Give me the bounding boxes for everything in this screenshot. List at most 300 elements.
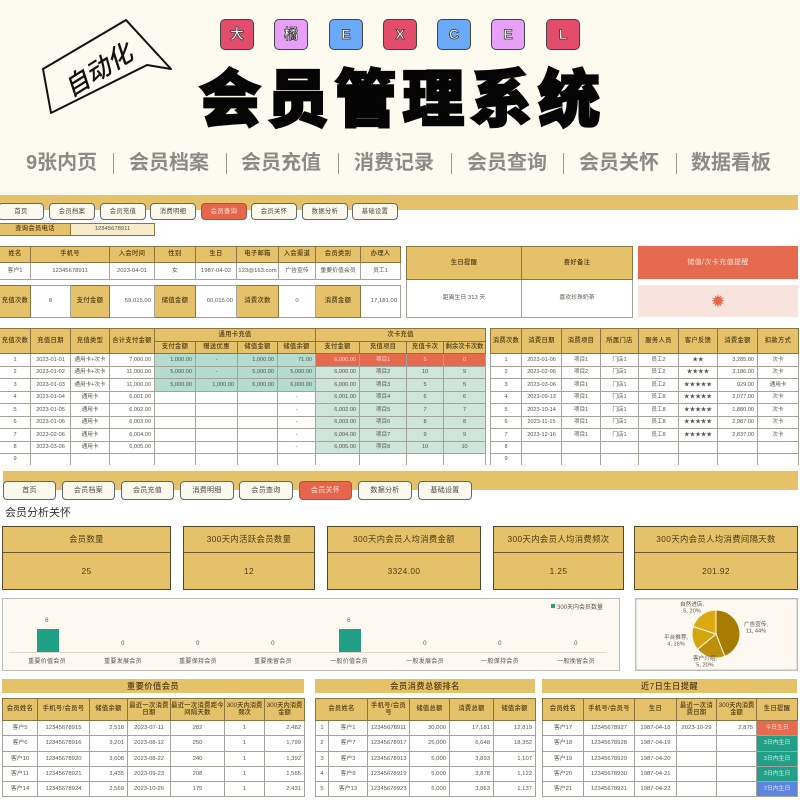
table: member profile: 生日 bbox=[209, 250, 223, 257]
table: recharge records: 5,000.00 bbox=[252, 369, 274, 375]
table: recharge records: 2023-02-06 bbox=[36, 432, 65, 438]
table: birthday reminder list: 12345678931 bbox=[591, 786, 627, 792]
table: birthday reminder list: 3日内生日 bbox=[764, 756, 790, 762]
table: spending ranking: 储值总额 bbox=[416, 705, 443, 712]
table: consumption records: 门店1 bbox=[612, 432, 627, 438]
table: recharge records: 6,004.00 bbox=[129, 432, 151, 438]
navigation bar: member query page: 会员档案 bbox=[59, 208, 85, 215]
table: recharge records: 8 bbox=[423, 419, 427, 425]
KPI card: member count: 25 bbox=[81, 566, 92, 576]
table: consumption records: 次卡 bbox=[772, 394, 784, 400]
table: consumption records: ★★ bbox=[692, 357, 704, 363]
table: birthday reminder list: 12345678927 bbox=[591, 725, 627, 731]
table: consumption records: 项目1 bbox=[574, 382, 588, 388]
table: spending ranking: 3,863 bbox=[475, 786, 490, 792]
table: spending ranking: 30,000 bbox=[428, 725, 446, 731]
table: important value members: 2023-08-12 bbox=[134, 740, 164, 746]
table: spending ranking: 12345678923 bbox=[370, 786, 407, 792]
table: consumption records: 次卡 bbox=[772, 419, 784, 425]
table: important value members: 1,799 bbox=[286, 740, 301, 746]
table: important value members: 客户11 bbox=[11, 771, 29, 777]
value labels: 0 bbox=[574, 641, 578, 647]
value labels: 0 bbox=[196, 641, 200, 647]
table: recharge records: 充值类型 bbox=[77, 337, 103, 344]
table: important value members: 1,565 bbox=[286, 771, 301, 777]
table: important value members: 客户10 bbox=[11, 756, 29, 762]
table: recharge records: 2023-01-04 bbox=[36, 394, 65, 400]
table: member totals: 0 bbox=[295, 298, 299, 304]
navigation bar: member care page: 会员查询 bbox=[251, 487, 281, 494]
value labels: 6 bbox=[45, 618, 49, 624]
navigation bar: member care page bbox=[3, 481, 472, 500]
table: consumption records: 3,186.00 bbox=[732, 369, 754, 375]
header background bbox=[0, 0, 800, 195]
table: consumption records: 项目1 bbox=[574, 357, 588, 363]
table: recharge records: 剩余次卡次数 bbox=[446, 343, 483, 350]
table: recharge records: 1 bbox=[13, 357, 17, 363]
table: spending ranking bbox=[315, 698, 536, 797]
table: important value members: 12345678915 bbox=[45, 725, 82, 731]
table: recharge records: 通用卡 bbox=[82, 394, 98, 400]
table: important value members: 300天内消费频次 bbox=[227, 702, 262, 716]
table: spending ranking: 2 bbox=[320, 740, 324, 746]
table: recharge records: 支付金额 bbox=[324, 343, 351, 350]
table: birthday reminder list: 3日内生日 bbox=[764, 771, 790, 777]
table: consumption records: 所属门店 bbox=[606, 337, 633, 344]
table: spending ranking: 5,000 bbox=[431, 756, 446, 762]
table: important value members: 1 bbox=[243, 756, 246, 762]
brand badges: 大橘EXCEL: C bbox=[449, 26, 459, 42]
pie chart: join channels: 客户介绍, bbox=[693, 654, 717, 662]
section title: birthday reminder: 近7日生日提醒 bbox=[641, 681, 698, 691]
table: birthday reminder list: 12345678930 bbox=[591, 771, 627, 777]
section title: important value members: 重要价值会员 bbox=[127, 681, 179, 691]
KPI card: active members: 12 bbox=[244, 566, 254, 576]
table: consumption records: 门店1 bbox=[612, 382, 627, 388]
brand badges: 大橘EXCEL: E bbox=[503, 26, 513, 42]
table: consumption records: 4 bbox=[504, 394, 508, 400]
table: important value members: 300天内消费金额 bbox=[267, 702, 302, 716]
table: important value members: 最近一次消费距今间隔天数 bbox=[171, 702, 224, 716]
table: important value members: 12345678924 bbox=[45, 786, 82, 792]
table: birthday reminder list: 1987-04-22 bbox=[640, 786, 671, 792]
table: birthday reminder list: 生日 bbox=[649, 705, 662, 712]
subtitle feature list: 消费记录 bbox=[354, 152, 434, 174]
navigation bar: member query page: 基础设置 bbox=[362, 208, 388, 215]
table: important value members: 3,608 bbox=[109, 756, 124, 762]
navigation bar: member query page: 消费明细 bbox=[160, 208, 186, 215]
table: recharge records: - bbox=[296, 444, 297, 450]
table: recharge records: 5,000.00 bbox=[170, 382, 192, 388]
navigation bar: member query page: 首页 bbox=[14, 208, 28, 215]
navigation bar: member care page: 基础设置 bbox=[430, 487, 460, 494]
table: spending ranking: 客户1 bbox=[340, 725, 356, 731]
table: consumption records: 项目1 bbox=[574, 432, 588, 438]
table: recharge records: 通用卡+次卡 bbox=[74, 357, 106, 363]
section heading: 会员分析关怀 bbox=[5, 507, 71, 519]
navigation bar: member query page: 会员查询 bbox=[211, 208, 237, 215]
table: consumption records: 9 bbox=[504, 456, 508, 462]
legend: 300天内会员数量 bbox=[557, 605, 603, 611]
table: member profile: 姓名 bbox=[8, 250, 22, 257]
KPI card: average interval: 300天内会员人均消费间隔天数 bbox=[656, 534, 776, 544]
table: consumption records: ★★★★★ bbox=[684, 382, 712, 388]
table: member profile: 广告宣传 bbox=[285, 268, 309, 274]
table: recharge records: 6 bbox=[13, 419, 17, 425]
table: member profile: 办理人 bbox=[371, 250, 390, 257]
table: important value members: 客户6 bbox=[12, 740, 28, 746]
navigation bar: member query page: 数据分析 bbox=[312, 208, 338, 215]
table: member totals: 消费金额 bbox=[325, 297, 351, 304]
table: birthday reminder and preferences: 生日提醒 bbox=[451, 259, 477, 266]
table: birthday reminder list: 3日内生日 bbox=[764, 740, 790, 746]
table: birthday reminder list: 客户18 bbox=[554, 740, 572, 746]
table: recharge records: 充值项目 bbox=[370, 343, 396, 350]
subtitle feature list: 会员查询 bbox=[467, 152, 547, 174]
table: spending ranking: 客户13 bbox=[339, 786, 357, 792]
value labels: 6 bbox=[347, 618, 351, 624]
table: consumption records: 通用卡 bbox=[770, 382, 786, 388]
brand badges: 大橘EXCEL bbox=[220, 19, 580, 50]
table: spending ranking: 3 bbox=[320, 756, 324, 762]
KPI card: member count bbox=[2, 526, 171, 590]
table: important value members: 1,392 bbox=[286, 756, 301, 762]
table: recharge records: 充值次数 bbox=[2, 337, 28, 344]
table: spending ranking: 5,000 bbox=[431, 771, 446, 777]
table: consumption records: 员工8 bbox=[651, 419, 666, 425]
table: recharge records: 9 bbox=[463, 432, 466, 438]
table: spending ranking: 1,137 bbox=[517, 786, 532, 792]
table: recharge records bbox=[0, 328, 486, 465]
table: member profile bbox=[0, 246, 401, 280]
table: important value members: 2,569 bbox=[109, 786, 124, 792]
table: important value members: 储值余额 bbox=[95, 705, 122, 712]
table: spending ranking: 17,181 bbox=[472, 725, 490, 731]
table: important value members: 12345678916 bbox=[45, 740, 82, 746]
ribbon tag: 自动化 bbox=[42, 19, 172, 114]
table: recharge records: 项目1 bbox=[376, 357, 390, 363]
navigation bar: member care page: 会员档案 bbox=[74, 487, 103, 494]
table: consumption records: 2023-02-06 bbox=[527, 369, 556, 375]
table: recharge records: 6,000.00 bbox=[334, 382, 356, 388]
table: consumption records: 1 bbox=[504, 357, 508, 363]
table: birthday reminder and preferences: 喜欢珍珠奶茶 bbox=[559, 295, 595, 301]
table: important value members: 1 bbox=[243, 740, 246, 746]
table: important value members: 客户14 bbox=[11, 786, 29, 792]
second page yellow band bbox=[3, 471, 798, 490]
subtitle feature list: 9张内页 bbox=[26, 152, 97, 174]
table: member profile: 女 bbox=[172, 268, 178, 274]
table: recharge records: 10 bbox=[422, 369, 428, 375]
table: consumption records: 次卡 bbox=[772, 432, 784, 438]
table: birthday reminder and preferences: 喜好备注 bbox=[564, 259, 590, 266]
axis line bbox=[9, 652, 606, 653]
table: birthday reminder list: 生日提醒 bbox=[764, 705, 790, 712]
brand badges: 大橘EXCEL: 橘 bbox=[284, 26, 298, 42]
table: spending ranking: 客户7 bbox=[340, 740, 356, 746]
table: recharge records: 项目5 bbox=[376, 407, 390, 413]
table: recharge records: - bbox=[296, 419, 297, 425]
table: recharge records: 6,000.00 bbox=[334, 369, 356, 375]
table: recharge records: 6 bbox=[463, 394, 466, 400]
table: recharge records: 1,000.00 bbox=[252, 357, 274, 363]
table: recharge records: 6,003.00 bbox=[129, 419, 151, 425]
table: recharge records: 8 bbox=[463, 419, 466, 425]
table: recharge records: 通用卡充值 bbox=[219, 331, 252, 338]
table: recharge records: - bbox=[216, 369, 217, 375]
value labels: 0 bbox=[121, 641, 125, 647]
navigation bar: member query page bbox=[0, 203, 398, 220]
table: recharge records: 2023-01-05 bbox=[36, 407, 65, 413]
section title: spending ranking: 会员消费总额排名 bbox=[390, 681, 460, 691]
table: member profile: 客户1 bbox=[7, 268, 23, 274]
table: birthday reminder list: 客户19 bbox=[554, 756, 572, 762]
recharge reminder status with star icon bbox=[638, 285, 798, 317]
table: recharge records: 7,000.00 bbox=[129, 357, 151, 363]
table: recharge records: 8 bbox=[13, 444, 17, 450]
table: consumption records: 门店1 bbox=[612, 394, 627, 400]
brand badges: 大橘EXCEL: E bbox=[341, 26, 351, 42]
table: member profile: 入会渠道 bbox=[284, 250, 310, 257]
navigation bar: member care page: 会员关怀 bbox=[311, 487, 340, 494]
table: consumption records: 2023-10-14 bbox=[527, 407, 556, 413]
table: consumption records: 项目2 bbox=[574, 369, 588, 375]
table: recharge records: - bbox=[296, 407, 297, 413]
table: recharge records: 7 bbox=[423, 407, 427, 413]
table: birthday reminder list: 1987-04-18 bbox=[640, 725, 671, 731]
table: member profile: 12345678911 bbox=[52, 268, 88, 274]
table: consumption records: 员工2 bbox=[651, 357, 666, 363]
query phone field: 查询会员电话 bbox=[15, 225, 55, 232]
table: important value members: 2023-08-22 bbox=[134, 756, 164, 762]
table: consumption records: 消费日期 bbox=[528, 337, 555, 344]
KPI card: average frequency: 1.25 bbox=[550, 566, 567, 576]
navigation bar: member care page: 会员充值 bbox=[133, 487, 162, 494]
table: birthday reminder list: 300天内消费金额 bbox=[719, 702, 754, 716]
table: birthday reminder list: 12345678929 bbox=[591, 756, 627, 762]
table: recharge records: 5 bbox=[423, 382, 427, 388]
brand badges: 大橘EXCEL: 大 bbox=[230, 26, 244, 42]
table: recharge records: 6,002.00 bbox=[129, 407, 151, 413]
navigation bar: member query page: 会员关怀 bbox=[261, 208, 287, 215]
table: recharge records: 项目4 bbox=[376, 394, 390, 400]
table: recharge records: 通用卡 bbox=[82, 444, 98, 450]
ribbon tag: 自动化: 自动化 bbox=[59, 38, 140, 103]
table: important value members: 2023-07-11 bbox=[134, 725, 164, 731]
table: spending ranking: 12345678911 bbox=[371, 725, 406, 731]
table: consumption records: 门店1 bbox=[612, 407, 627, 413]
table: consumption records: 项目1 bbox=[574, 419, 588, 425]
table: consumption records: 次卡 bbox=[772, 369, 784, 375]
pie chart: join channels: 自然进店, bbox=[680, 600, 704, 608]
table: member totals: 储值金额 bbox=[162, 297, 188, 304]
table: birthday reminder list: 2023-10-29 bbox=[681, 725, 712, 731]
table: important value members: 2,518 bbox=[109, 725, 124, 731]
category labels: 重要价值会员 bbox=[28, 659, 66, 665]
table: recharge records: 通用卡 bbox=[82, 407, 98, 413]
table: member profile: 会员类别 bbox=[325, 250, 351, 257]
table: consumption records: ★★★★★ bbox=[684, 407, 712, 413]
value labels: 0 bbox=[423, 641, 427, 647]
table: birthday reminder list: 12345678928 bbox=[591, 740, 627, 746]
brand badges: 大橘EXCEL: L bbox=[559, 26, 567, 42]
table: member profile: 入会时间 bbox=[119, 250, 145, 257]
table: consumption records: 员工2 bbox=[651, 382, 666, 388]
table: birthday reminder list: 2,875 bbox=[738, 725, 753, 731]
table: recharge records: 通用卡+次卡 bbox=[74, 369, 106, 375]
bar: general value members bbox=[339, 628, 361, 652]
table: recharge records: 6,001.00 bbox=[334, 394, 356, 400]
table: spending ranking: 12345678919 bbox=[370, 771, 407, 777]
table: spending ranking: 1,122 bbox=[517, 771, 532, 777]
KPI card: average frequency bbox=[493, 526, 624, 590]
recharge reminder header: 储值/次卡充值提醒 bbox=[687, 259, 749, 266]
table: recharge records: 次卡充值 bbox=[387, 331, 414, 338]
table: important value members: 175 bbox=[193, 786, 202, 792]
table: birthday reminder list: 1987-04-19 bbox=[640, 740, 671, 746]
table: consumption records: 次卡 bbox=[772, 407, 784, 413]
table: consumption records: ★★★★★ bbox=[684, 432, 712, 438]
table: member profile: 员工1 bbox=[373, 268, 388, 274]
table: spending ranking: 手机号/会员号 bbox=[371, 702, 406, 716]
table: birthday reminder list: 最近一次消费日期 bbox=[680, 702, 713, 716]
table: spending ranking: 储值余额 bbox=[501, 705, 528, 712]
table: important value members: 2,431 bbox=[286, 786, 301, 792]
table: recharge records: 10 bbox=[461, 444, 468, 450]
table: recharge records: 6 bbox=[423, 394, 427, 400]
table: recharge records: 项目6 bbox=[376, 419, 390, 425]
table: member totals: 消费次数 bbox=[244, 297, 271, 304]
table: consumption records: 2023-11-15 bbox=[527, 419, 556, 425]
table: recharge records: 支付金额 bbox=[162, 343, 188, 350]
value labels: 0 bbox=[498, 641, 502, 647]
table: birthday reminder list: 手机号/会员号 bbox=[588, 705, 630, 712]
pie chart: join channels: 5, 20% bbox=[696, 662, 714, 668]
table: birthday reminder list: 会员姓名 bbox=[550, 705, 576, 712]
table: consumption records: 消费金额 bbox=[724, 337, 751, 344]
subtitle feature list: 会员关怀 bbox=[579, 152, 659, 174]
table: birthday reminder list: 客户17 bbox=[554, 725, 572, 731]
table: recharge records: 充值卡次 bbox=[412, 343, 438, 350]
table: consumption records: ★★★★★ bbox=[684, 394, 712, 400]
table: recharge records: 赠送优惠 bbox=[203, 343, 230, 350]
table: recharge records: 5 bbox=[423, 357, 427, 363]
table: spending ranking: 12345678913 bbox=[370, 756, 407, 762]
navigation bar: member query page: 会员充值 bbox=[110, 208, 136, 215]
table: recharge records: 通用卡 bbox=[82, 432, 98, 438]
table: consumption records: 员工8 bbox=[651, 432, 666, 438]
KPI card: active members: 300天内活跃会员数量 bbox=[207, 534, 291, 544]
category labels: 一般价值会员 bbox=[330, 659, 368, 665]
table: recharge records: 2023-03-06 bbox=[36, 444, 65, 450]
table: important value members: 282 bbox=[193, 725, 202, 731]
table: recharge records: 71.00 bbox=[298, 357, 312, 363]
KPI card: active members bbox=[183, 526, 315, 590]
table: consumption records: 服务人员 bbox=[645, 337, 672, 344]
subtitle feature list bbox=[26, 152, 771, 174]
table: birthday reminder list: 7日内生日 bbox=[764, 786, 790, 792]
table: recharge records: 4 bbox=[13, 394, 17, 400]
table: important value members bbox=[2, 698, 305, 797]
table: important value members: 3,435 bbox=[109, 771, 124, 777]
table: important value members: 最近一次消费日期 bbox=[129, 702, 169, 716]
table: recharge records: 5 bbox=[13, 407, 17, 413]
table: recharge records: 合计支付金额 bbox=[112, 337, 152, 344]
table: recharge records: 项目7 bbox=[376, 432, 390, 438]
table: spending ranking: 消费总额 bbox=[458, 705, 485, 712]
table: recharge records: 6,005.00 bbox=[334, 444, 356, 450]
table: spending ranking: 1,107 bbox=[517, 756, 532, 762]
brand badges: 大橘EXCEL: X bbox=[395, 26, 405, 42]
table: member profile: 电子邮箱 bbox=[244, 250, 271, 257]
table: spending ranking: 3,878 bbox=[475, 771, 490, 777]
table: consumption records: 2023-09-13 bbox=[527, 394, 556, 400]
table: important value members: 12345678920 bbox=[45, 756, 82, 762]
table: recharge records: 6,005.00 bbox=[129, 444, 151, 450]
table: important value members: 2023-10-26 bbox=[134, 786, 164, 792]
table: spending ranking: 12345678917 bbox=[370, 740, 407, 746]
table: recharge records: 6,000.00 bbox=[334, 357, 356, 363]
table: consumption records bbox=[490, 328, 799, 465]
KPI card: average spend bbox=[327, 526, 481, 590]
table: important value members: 12345678921 bbox=[45, 771, 82, 777]
table: important value members: 240 bbox=[193, 756, 202, 762]
table: recharge records: 储值余额 bbox=[283, 343, 310, 350]
table: birthday reminder list: 今日生日 bbox=[765, 725, 789, 731]
table: important value members: 会员姓名 bbox=[7, 705, 33, 712]
pie chart: join channels bbox=[635, 598, 798, 671]
pie chart: join channels: 4, 16% bbox=[667, 642, 685, 648]
navigation bar: member care page: 数据分析 bbox=[370, 487, 400, 494]
query phone field bbox=[0, 223, 155, 236]
table: recharge records: 5,000.00 bbox=[290, 369, 312, 375]
navigation bar: member care page: 首页 bbox=[22, 487, 37, 494]
table: important value members: 1 bbox=[243, 771, 246, 777]
pie chart: join channels: 11, 44% bbox=[746, 628, 766, 634]
table: consumption records: 门店1 bbox=[612, 357, 627, 363]
pie chart: join channels: 5, 20% bbox=[683, 608, 701, 614]
table: consumption records: 项目1 bbox=[574, 394, 588, 400]
table: consumption records: 项目1 bbox=[574, 407, 588, 413]
table: birthday reminder and preferences bbox=[406, 246, 633, 318]
table: recharge records: 9 bbox=[423, 432, 427, 438]
table: recharge records: 0 bbox=[463, 357, 466, 363]
section title: birthday reminder bbox=[542, 679, 797, 693]
table: consumption records: 扣款方式 bbox=[765, 337, 791, 344]
table: member totals: 59,015.00 bbox=[125, 298, 151, 304]
category labels: 重要发展会员 bbox=[104, 659, 142, 665]
KPI card: average spend: 3324.00 bbox=[388, 566, 420, 576]
table: recharge records: 7 bbox=[463, 407, 466, 413]
table: recharge records: 1,000.00 bbox=[212, 382, 234, 388]
table: important value members: 1 bbox=[243, 786, 246, 792]
pie chart: join channels: 平台推荐, bbox=[664, 633, 688, 641]
table: consumption records: 门店1 bbox=[612, 419, 627, 425]
table: birthday reminder list: 客户20 bbox=[554, 771, 572, 777]
category labels: 一般保持会员 bbox=[481, 659, 519, 665]
subtitle feature list: 数据看板 bbox=[691, 152, 771, 174]
table: consumption records: 5 bbox=[504, 407, 508, 413]
table: important value members: 250 bbox=[193, 740, 202, 746]
table: recharge records: 11,000.00 bbox=[127, 369, 151, 375]
table: important value members: 客户5 bbox=[12, 725, 28, 731]
value labels bbox=[45, 618, 578, 647]
table: consumption records: 消费次数 bbox=[493, 337, 519, 344]
table: recharge records: 充值日期 bbox=[37, 337, 64, 344]
table: birthday reminder list: 1987-04-20 bbox=[640, 756, 671, 762]
table: recharge records: 6,000.00 bbox=[290, 382, 312, 388]
table: member profile: 1987-04-02 bbox=[201, 268, 231, 274]
